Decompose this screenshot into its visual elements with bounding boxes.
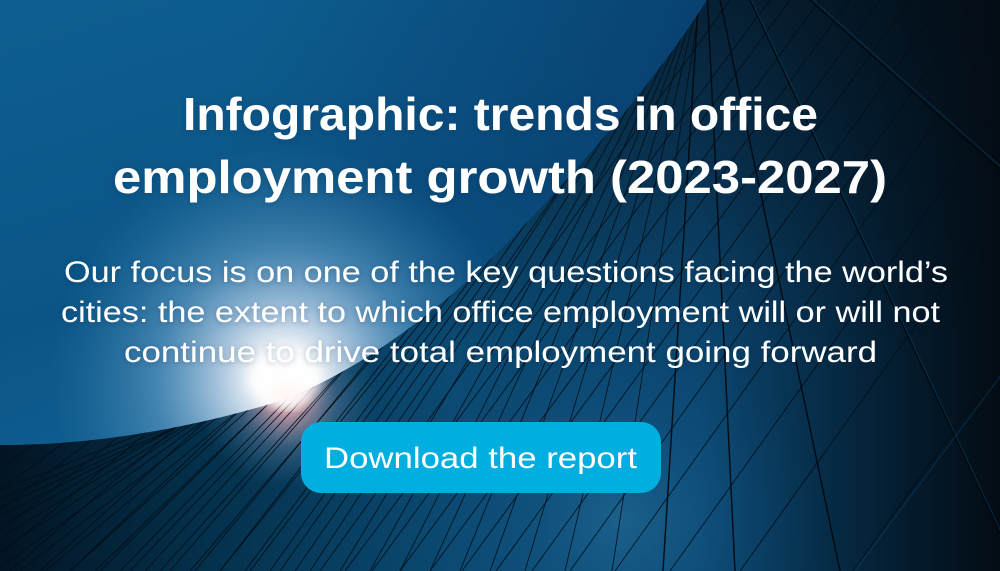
title: employment growth (2023-2027) bbox=[113, 151, 887, 203]
button: download the report: Download the report bbox=[324, 442, 638, 475]
intro text: continue to drive total employment going forward bbox=[124, 336, 877, 369]
title: Infographic: trends in office bbox=[183, 88, 818, 140]
button: download the report bbox=[301, 422, 661, 493]
intro text bbox=[61, 256, 948, 369]
sun flare bbox=[249, 351, 321, 406]
title bbox=[113, 88, 887, 203]
intro text: cities: the extent to which office employment will or will not bbox=[61, 296, 941, 329]
intro text: Our focus is on one of the key questions facing the world’s bbox=[64, 256, 948, 289]
